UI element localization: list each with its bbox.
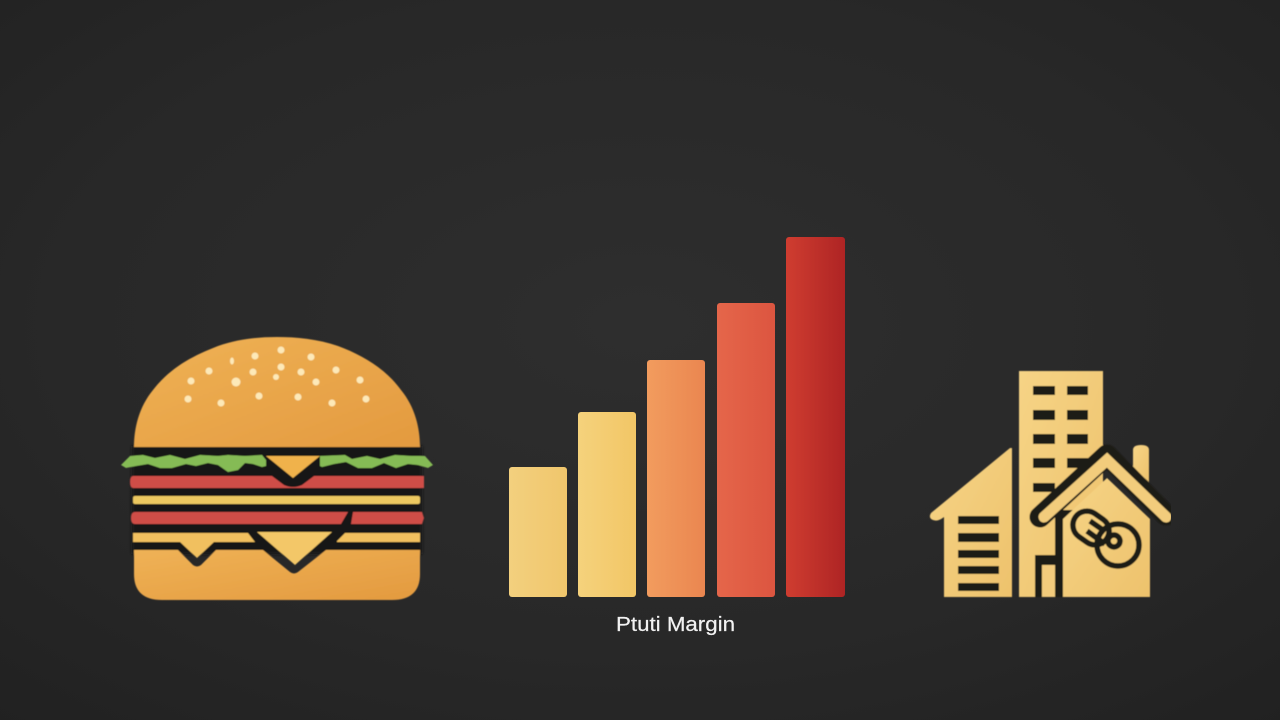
bottom bun <box>134 550 420 600</box>
lettuce right <box>320 455 433 468</box>
top bun <box>134 337 420 447</box>
tower <box>1019 371 1103 597</box>
large cheese triangle <box>257 532 332 565</box>
bar chart <box>509 237 845 597</box>
chimney <box>1133 445 1149 482</box>
lettuce left <box>121 455 266 472</box>
left house <box>930 448 1012 597</box>
tower door <box>1035 555 1062 597</box>
icon: buildings and house <box>930 371 1166 597</box>
bar 5 <box>786 237 845 597</box>
key tag <box>1067 506 1139 566</box>
bar 2 <box>578 412 636 597</box>
roof <box>1044 460 1166 517</box>
top cheese <box>266 456 320 478</box>
right house body <box>1063 478 1150 597</box>
roof outline <box>1040 455 1166 517</box>
bar 4 <box>717 303 775 597</box>
tower windows <box>1033 386 1088 492</box>
bar 3 <box>647 360 705 597</box>
middle yellow layer <box>133 496 420 504</box>
icon: burger <box>121 337 433 600</box>
gap between tower and house <box>1055 510 1105 597</box>
lower red patty <box>131 512 424 524</box>
right cheese strip <box>337 533 420 542</box>
left cheese strip with drip <box>133 533 255 558</box>
sesame seeds <box>184 346 370 406</box>
burger shadow <box>132 446 422 554</box>
top red patty <box>130 476 424 488</box>
chart label: Ptuti Margin <box>616 614 735 636</box>
bar 1 <box>509 467 567 597</box>
left house windows <box>958 516 999 591</box>
